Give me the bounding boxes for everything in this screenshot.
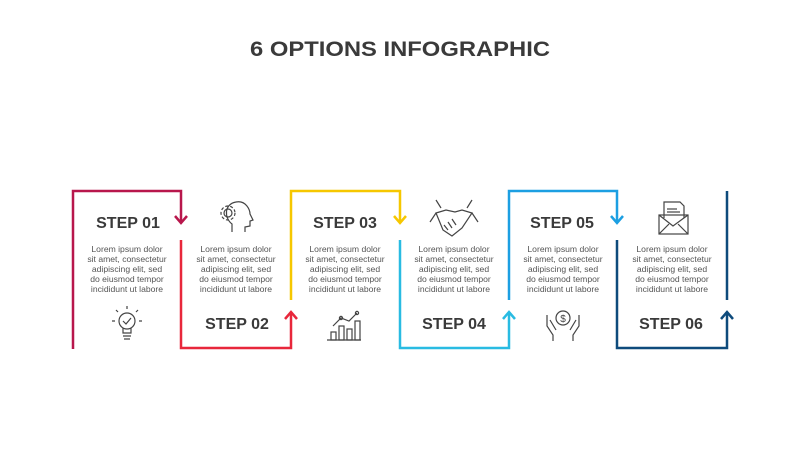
text blocks: incididunt ut labore: [91, 284, 163, 294]
title: 6 OPTIONS INFOGRAPHIC: [250, 38, 550, 61]
text blocks: [87, 244, 712, 294]
text blocks: adipiscing elit, sed: [201, 264, 271, 274]
icon: bar chart: [327, 311, 361, 340]
text blocks: do eiusmod tempor: [635, 274, 709, 284]
text blocks: do eiusmod tempor: [90, 274, 164, 284]
text blocks: incididunt ut labore: [527, 284, 599, 294]
step labels: STEP 03: [313, 215, 377, 232]
text blocks: adipiscing elit, sed: [528, 264, 598, 274]
text blocks: Lorem ipsum dolor: [527, 244, 599, 254]
text blocks: Lorem ipsum dolor: [309, 244, 381, 254]
text blocks: adipiscing elit, sed: [92, 264, 162, 274]
step labels: STEP 06: [639, 316, 703, 333]
step labels: STEP 04: [422, 316, 486, 333]
text blocks: Lorem ipsum dolor: [200, 244, 272, 254]
icon: lightbulb: [112, 306, 142, 339]
text blocks: sit amet, consectetur: [196, 254, 276, 264]
text blocks: do eiusmod tempor: [526, 274, 600, 284]
text blocks: Lorem ipsum dolor: [636, 244, 708, 254]
text blocks: sit amet, consectetur: [305, 254, 385, 264]
icon: head with gear: [221, 202, 253, 232]
step 1 path: [73, 191, 187, 349]
text blocks: adipiscing elit, sed: [419, 264, 489, 274]
icon: hands with coin: [547, 311, 579, 341]
text blocks: sit amet, consectetur: [523, 254, 603, 264]
text blocks: sit amet, consectetur: [632, 254, 712, 264]
step 2 path: [181, 240, 297, 348]
icon: handshake: [430, 200, 478, 236]
text blocks: Lorem ipsum dolor: [418, 244, 490, 254]
step labels: STEP 05: [530, 215, 594, 232]
text blocks: do eiusmod tempor: [417, 274, 491, 284]
text blocks: do eiusmod tempor: [199, 274, 273, 284]
text blocks: sit amet, consectetur: [414, 254, 494, 264]
text blocks: incididunt ut labore: [200, 284, 272, 294]
step labels: STEP 01: [96, 215, 160, 232]
text blocks: do eiusmod tempor: [308, 274, 382, 284]
text blocks: incididunt ut labore: [309, 284, 381, 294]
step 5 path: [509, 191, 623, 300]
step 3 path: [291, 191, 406, 300]
text blocks: Lorem ipsum dolor: [91, 244, 163, 254]
icon: envelope: [659, 202, 688, 234]
text blocks: incididunt ut labore: [418, 284, 490, 294]
step labels: [96, 215, 703, 333]
text blocks: adipiscing elit, sed: [310, 264, 380, 274]
step labels: STEP 02: [205, 316, 269, 333]
icon: hands with coin: $: [560, 314, 566, 325]
text blocks: incididunt ut labore: [636, 284, 708, 294]
text blocks: adipiscing elit, sed: [637, 264, 707, 274]
step 4 path: [400, 240, 515, 348]
text blocks: sit amet, consectetur: [87, 254, 167, 264]
step 6 path: [617, 191, 733, 348]
